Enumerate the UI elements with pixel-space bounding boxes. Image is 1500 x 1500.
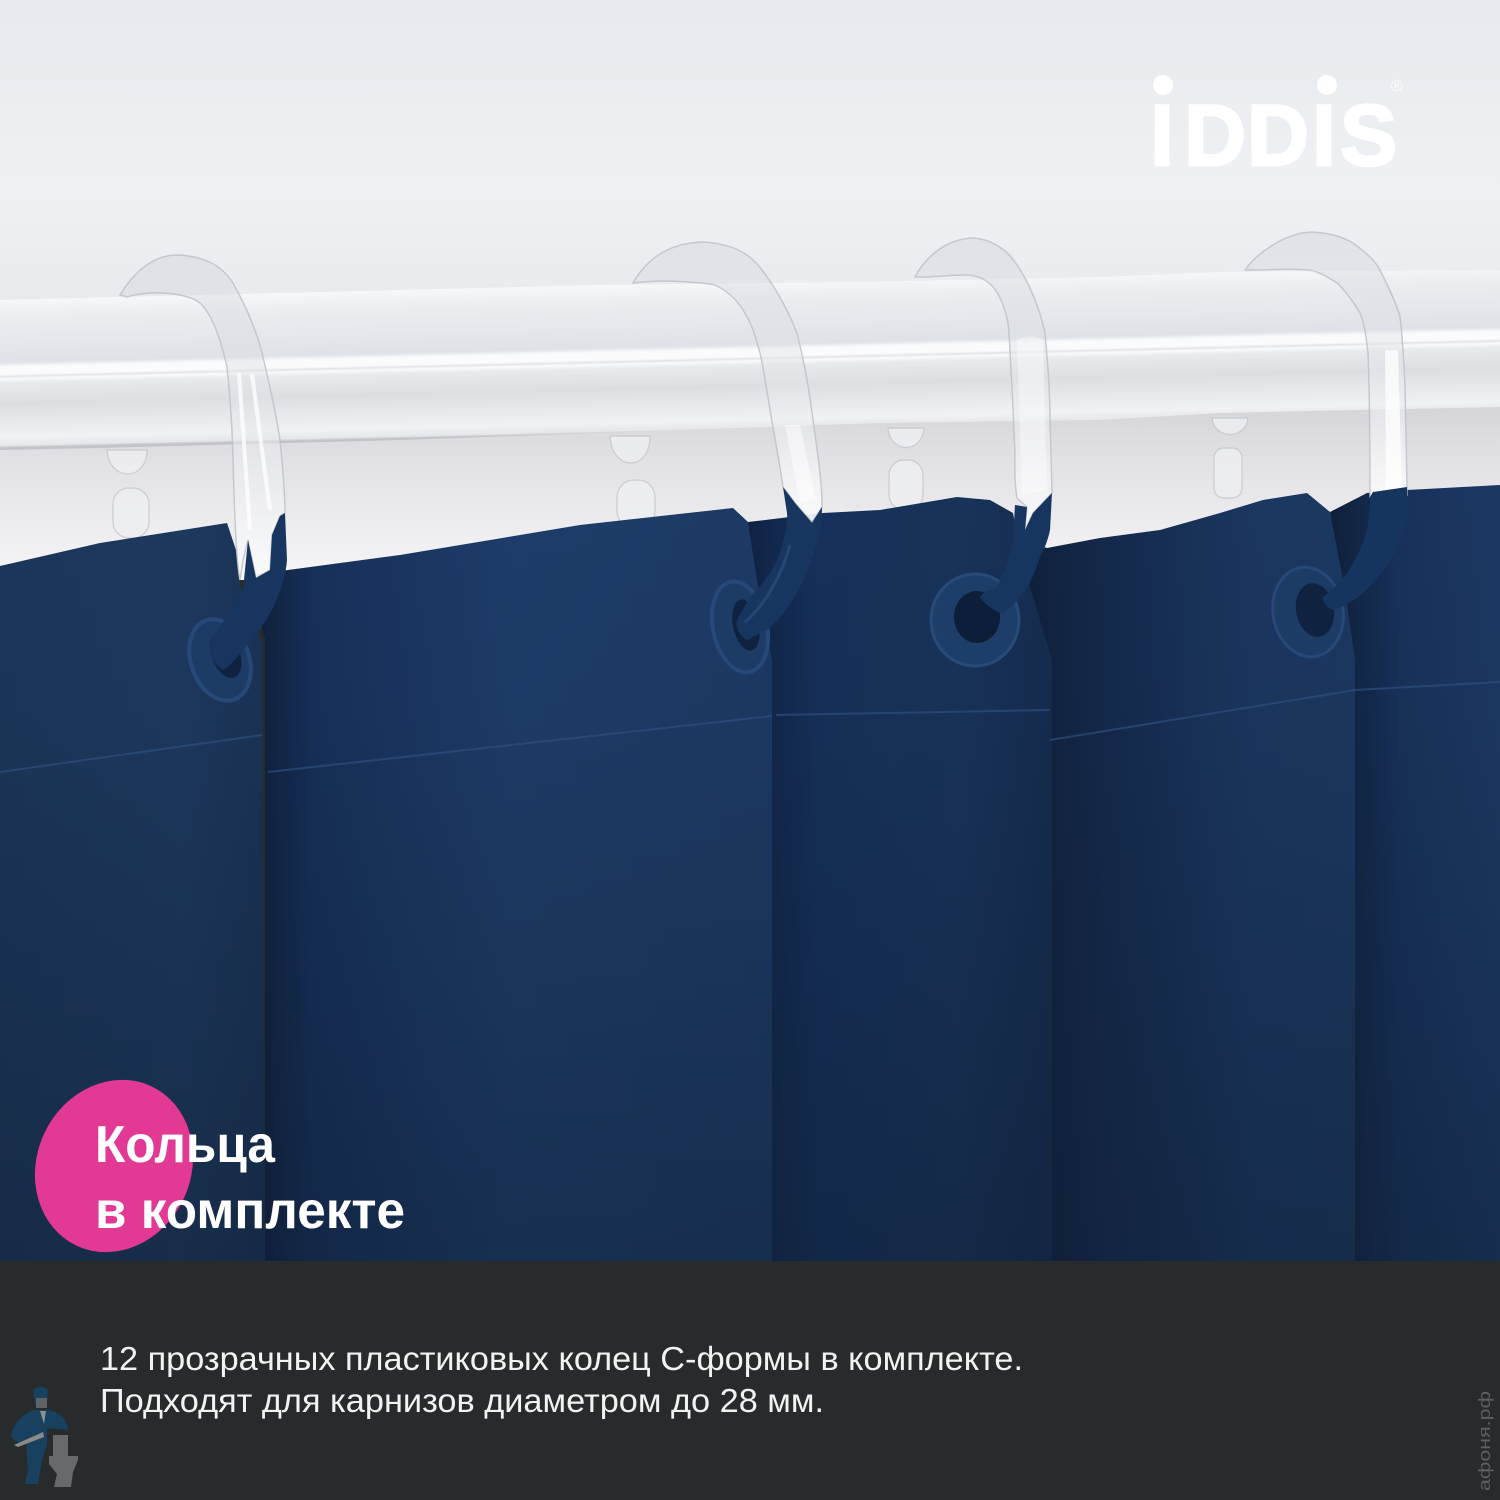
brand logo: IDDIS: ® — [1391, 78, 1403, 95]
panel fold 4 — [1020, 493, 1355, 1262]
description text: Подходят для карнизов диаметром до 28 мм. — [100, 1382, 824, 1419]
brand logo: IDDIS: IDDIS — [1150, 88, 1397, 184]
eyelet 4 — [1266, 562, 1350, 662]
panel fold 2 — [250, 508, 772, 1262]
curtain fabric — [0, 480, 1500, 1262]
icon: plumber with toilet — [11, 1387, 78, 1487]
description text — [100, 1340, 1023, 1419]
bottom dark band — [0, 1261, 1500, 1500]
eyelet 3 — [931, 574, 1019, 666]
eyelet 1 — [178, 611, 262, 709]
ring 2 — [633, 242, 822, 678]
photo background: wall — [0, 0, 1500, 320]
pink accent circle — [7, 1054, 221, 1278]
wall strip under the rod — [0, 400, 1500, 580]
heading: rings included: Кольца — [95, 1116, 276, 1174]
curtain rod — [0, 270, 1500, 450]
ring 4 — [1245, 232, 1407, 662]
panel fold 1 — [0, 523, 265, 1262]
panel fold 5 — [1330, 485, 1500, 1262]
ring 1 — [120, 255, 287, 709]
curtain hooks behind rod — [107, 418, 1248, 538]
panel fold 3 — [740, 497, 1052, 1262]
description text: 12 прозрачных пластиковых колец С-формы в комплекте. — [100, 1340, 1023, 1377]
heading: rings included: в комплекте — [95, 1182, 405, 1240]
watermark: afonya.rf: афоня.рф — [1475, 1391, 1494, 1491]
eyelet 2 — [704, 576, 776, 678]
heading: rings included — [95, 1116, 405, 1240]
ring 3 — [915, 238, 1052, 666]
